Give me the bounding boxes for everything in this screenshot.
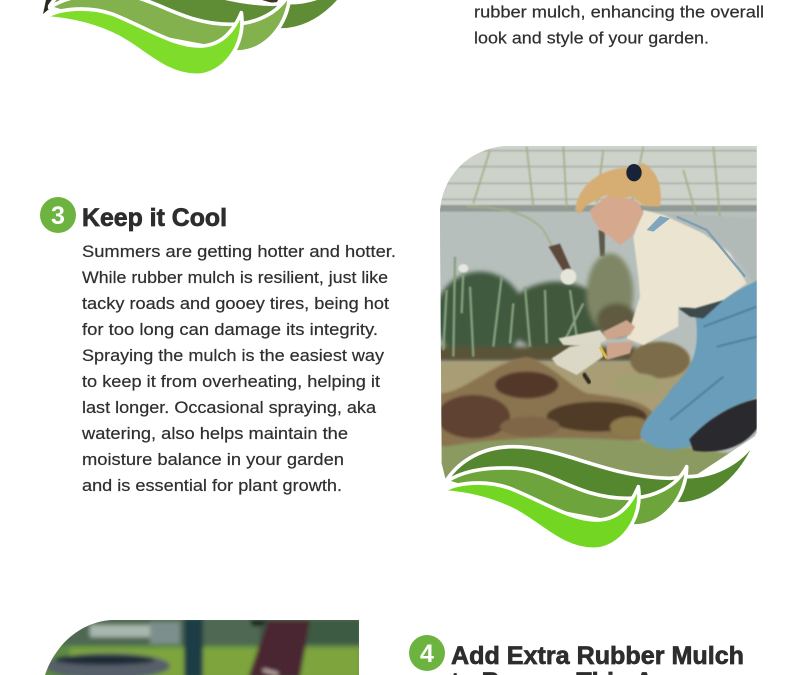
heading: Keep it Cool: Keep it Cool bbox=[82, 204, 227, 232]
photo remnant: top section bbox=[43, 0, 278, 14]
text block: section 3 body bbox=[81, 243, 396, 495]
boot bbox=[689, 398, 758, 452]
heading: Add Extra Rubber Mulch: Add Extra Rubber Mulch bbox=[451, 642, 744, 670]
head bbox=[590, 193, 643, 245]
text block: section 3 body: tacky roads and gooey tires, being hot bbox=[82, 295, 389, 313]
text block: end of section 2 bbox=[474, 4, 764, 48]
text block: section 3 body: for too long can damage its integrity. bbox=[82, 321, 378, 339]
text block: section 3 body: moisture balance in your garden bbox=[82, 451, 344, 469]
siding bbox=[430, 143, 770, 352]
foliage bbox=[435, 253, 637, 362]
photo: section 4 (cropped) bbox=[40, 618, 362, 675]
text block: section 3 body: last longer. Occasional spraying, aka bbox=[82, 399, 377, 417]
number badge 3 bbox=[40, 197, 76, 233]
number badge 3: 3 bbox=[51, 202, 65, 230]
text block: section 3 body: to keep it from overheating, helping it bbox=[82, 373, 380, 391]
text block: end of section 2: look and style of your garden. bbox=[474, 30, 709, 48]
text block: section 3 body: and is essential for plant growth. bbox=[82, 477, 342, 495]
jeans bbox=[640, 280, 758, 449]
leaf decoration: section 3 bbox=[442, 433, 758, 549]
number badge 4 bbox=[409, 635, 445, 671]
leaf decoration: top section bbox=[45, 0, 361, 75]
number badge 4: 4 bbox=[420, 640, 434, 668]
text block: section 3 body: Spraying the mulch is the easiest way bbox=[82, 347, 385, 365]
waist shadow bbox=[678, 300, 723, 318]
text block: section 3 body: Summers are getting hotter and hotter. bbox=[82, 243, 396, 261]
text block: section 3 body: While rubber mulch is resilient, just like bbox=[82, 269, 388, 287]
photo: gardener kneeling in soil bbox=[440, 146, 757, 478]
shirt bbox=[627, 210, 747, 345]
text block: end of section 2: rubber mulch, enhancing the overall bbox=[474, 4, 764, 22]
text block: section 3 body: watering, also helps maintain the bbox=[81, 425, 348, 443]
ground bbox=[441, 340, 733, 478]
forearm and gloves bbox=[603, 320, 635, 340]
